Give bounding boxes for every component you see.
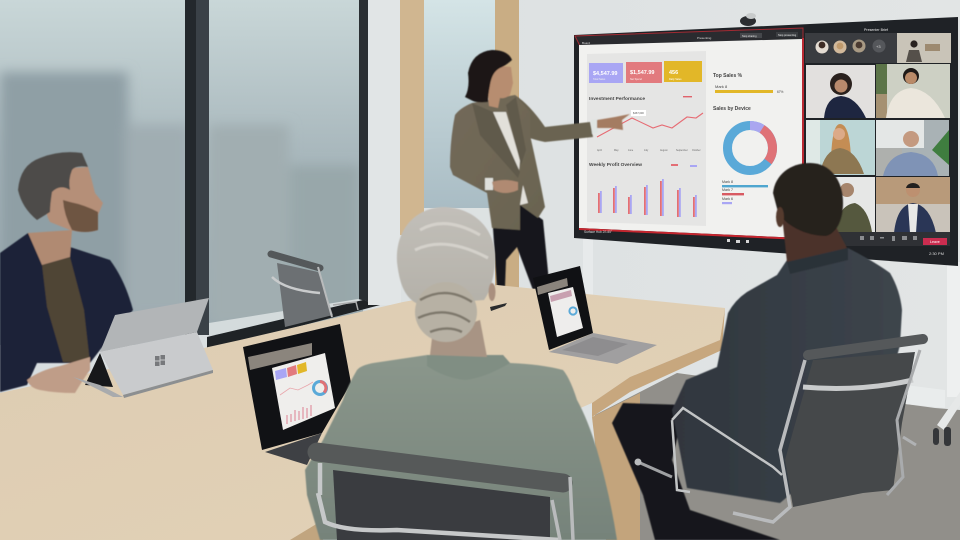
display: Presenting: [697, 36, 712, 40]
hand: [27, 357, 90, 393]
collar: [427, 355, 510, 380]
surface tablet: [73, 298, 213, 398]
woman seen from behind: [305, 207, 617, 540]
cuff and hand: [591, 119, 598, 134]
hair: [18, 152, 88, 220]
line chart: [597, 96, 703, 152]
hair: [397, 207, 495, 305]
man on left: [0, 152, 133, 393]
tile: person from behind: [806, 177, 875, 232]
donut chart: [728, 125, 772, 170]
taskbar icons: [727, 239, 749, 243]
line chart: April: [597, 149, 602, 152]
video gallery: [805, 33, 951, 256]
display: Presenter Brief: [864, 28, 888, 32]
stat card: net: Net Spend: [630, 78, 642, 81]
table: [0, 285, 725, 540]
top: [493, 112, 528, 205]
logo: [155, 355, 165, 366]
stat card: net: [626, 62, 662, 83]
camera: [740, 13, 756, 26]
heading: sales by device: Sales by Device: [713, 106, 751, 112]
presenter: [450, 50, 630, 290]
heading: top sales: Top Sales %: [713, 73, 743, 79]
man on right: [612, 163, 902, 540]
sweater: [305, 355, 617, 540]
stat card: count: Daily Sales: [669, 78, 682, 81]
window centre: [205, 0, 363, 335]
hub label: Surface Hub 2S 85": [584, 230, 612, 234]
neck: [782, 215, 847, 262]
participants row: +3: [876, 44, 881, 49]
device legend bars: Mark 8: [722, 180, 733, 184]
collar: [787, 248, 848, 274]
device legend bars: Mark 7: [722, 188, 733, 192]
shirt: [42, 257, 90, 363]
blazer: [450, 95, 545, 230]
jacket: [0, 233, 133, 392]
wooden window surround: [400, 0, 519, 290]
stat card: revenue: [589, 63, 623, 83]
trousers: [493, 203, 549, 290]
wheels: [933, 427, 951, 446]
display: Stop sharing: [742, 34, 757, 38]
back chair: [271, 254, 358, 327]
tile: woman in white blazer: [876, 64, 950, 118]
ear: [776, 207, 784, 227]
heading: weekly profit overview: Weekly Profit Overview: [589, 162, 642, 168]
line chart: June: [628, 149, 634, 152]
near chair: [317, 452, 573, 540]
right chair: [634, 339, 923, 522]
hair: [465, 50, 512, 102]
head: [773, 163, 843, 236]
neck: [28, 230, 72, 265]
tile: man in blue shirt: [876, 120, 949, 176]
device legend bars: [722, 180, 768, 204]
display: [574, 17, 958, 266]
top bar: [575, 28, 803, 46]
face: [487, 66, 513, 108]
display: Stop presenting: [778, 33, 797, 37]
chrome frame: [803, 380, 913, 388]
tile: man in suit: [876, 177, 950, 233]
video strip: [248, 343, 312, 370]
lapels: [472, 97, 526, 178]
top sales bar: 67%: [777, 90, 784, 94]
clock: 2:30 PM: [929, 251, 944, 256]
line chart: October: [692, 149, 701, 152]
hair bun: [415, 282, 477, 342]
clasped hand: [485, 178, 493, 190]
call controls: Leave: [930, 240, 940, 244]
laptop centre-left: [243, 324, 351, 465]
stat card: net: $1,547.99: [630, 70, 654, 76]
head: [46, 167, 103, 232]
trousers: [612, 403, 780, 540]
keyboard: [265, 433, 322, 465]
hair strands: [415, 224, 488, 258]
ear: [50, 186, 62, 204]
stat card: revenue: Total Sales: [593, 78, 606, 81]
line chart: August: [660, 149, 668, 152]
stat card: count: 456: [669, 70, 678, 76]
arm pointing: [515, 95, 593, 142]
top sales bar: [715, 84, 784, 94]
mini dashboard: [272, 353, 335, 430]
heading: investment performance: Investment Performance: [589, 96, 645, 102]
window left: [0, 0, 190, 345]
bar chart: [598, 164, 697, 217]
top sales bar: Mark 8: [715, 84, 728, 89]
window frames: [185, 0, 401, 348]
tile: woman with curly hair: [806, 65, 875, 118]
line chart: May: [614, 149, 619, 152]
tile: blonde woman: [806, 120, 875, 175]
hand: [492, 180, 518, 193]
stat card: revenue: $4,547.99: [593, 71, 617, 77]
call controls: [806, 232, 950, 246]
dashboard screen: [579, 38, 804, 243]
participants row: [805, 33, 951, 63]
laptop far: [533, 266, 657, 364]
beard: [63, 200, 98, 232]
device legend bars: Mark 6: [722, 197, 733, 201]
display stand: [583, 235, 960, 446]
top bar labels: Board: [582, 41, 590, 45]
neck: [430, 320, 487, 357]
line chart: July: [644, 149, 649, 152]
stat card: count: [664, 61, 702, 82]
jacket: [672, 248, 902, 503]
line chart: $467,000: [633, 111, 644, 115]
floor carpet: [595, 373, 960, 540]
line chart: September: [676, 149, 688, 152]
ear: [488, 283, 496, 301]
